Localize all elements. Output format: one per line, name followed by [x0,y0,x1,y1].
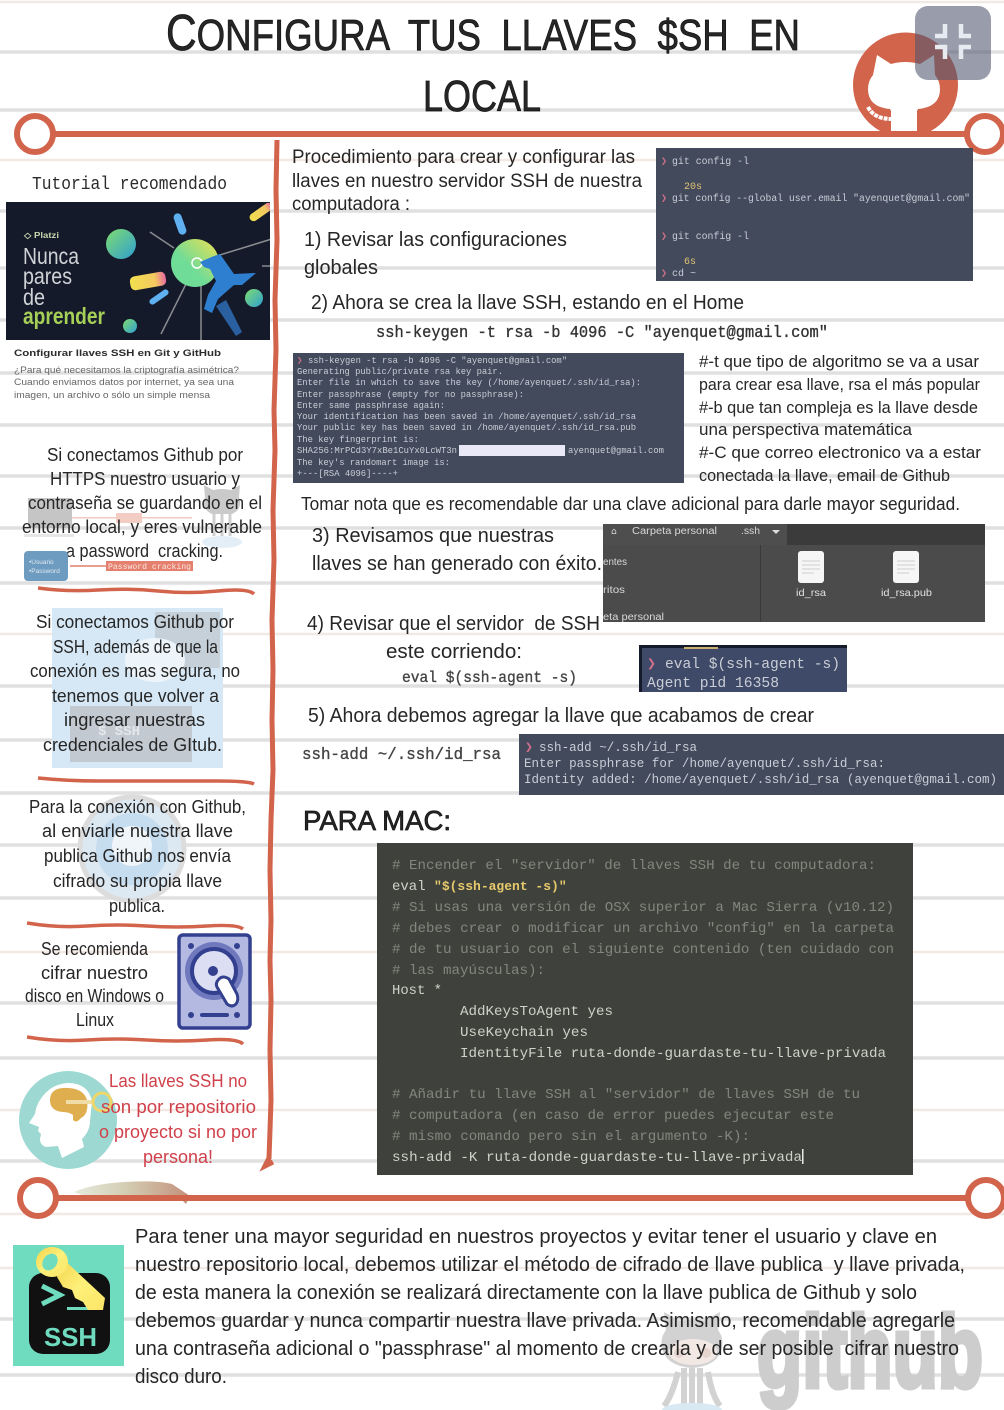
text: public key: cifrado su propia llave [53,871,222,891]
faded https diagram [24,485,242,548]
step 5: 5) Ahora debemos agregar la llave que acabamos de crear [308,705,814,727]
terminal: mac config: Host * [392,983,442,999]
text: ssh: ingresar nuestras [64,710,205,730]
screenshot: file manager: ritos [603,585,625,596]
conclusion text: nuestro repositorio local, debemos utilizar el método de cifrado de llave publica y llave privada, [135,1254,965,1276]
step 2 [311,292,828,343]
step 1: 1) Revisar las configuraciones [304,229,567,251]
terminal: mac config: # las mayúsculas): [392,963,545,979]
terminal: git config: git config -l [672,231,749,243]
heading: para mac: PARA MAC: [303,805,451,836]
screenshot: file manager: id_rsa.pub [881,587,932,599]
terminal: ssh-keygen: Enter file in which to save the key (/home/ayenquet/.ssh/id_rsa): [297,378,641,388]
screenshot: file manager: id_rsa [796,587,826,599]
step 2: ssh-keygen -t rsa -b 4096 -C "ayenquet@gmail.com" [376,324,828,343]
terminal: ssh-keygen: ayenquet@gmail.com [568,446,664,456]
image: platzi banner: de [23,284,45,310]
title [166,4,800,121]
bottom timeline bar [20,1180,1004,1216]
terminal: ssh-add: ssh-add ~/.ssh/id_rsa [539,740,697,755]
text: disk [25,939,164,1030]
text: callout: Las llaves SSH no [109,1071,247,1091]
conclusion text: una contraseña adicional o "passphrase" al momento de crearla y de ser posible cifrar nuestro [135,1338,959,1360]
terminal: git config: ❯ [661,194,667,205]
step 3: llaves se han generado con éxito. [312,553,602,575]
screenshot: file manager: ⌂ [611,527,617,537]
step 4 [307,613,600,687]
text: https [22,445,262,561]
text: https: contraseña se guardando en el [28,493,262,513]
notes: keygen flags: una perspectiva matemática [699,420,913,439]
badge: password cracking [70,561,193,572]
screenshot: file manager: .ssh [741,526,760,537]
terminal: ssh-keygen: Enter same passphrase again: [297,401,445,411]
terminal: ssh-keygen: Generating public/private rsa key pair. [297,367,503,377]
conclusion text: disco duro. [135,1366,227,1388]
terminal: ssh agent [639,645,847,692]
notes: keygen flags: #-C que correo electronico va a estar [699,443,981,462]
terminal: git config: cd ~ [672,268,696,280]
step 4: 4) Revisar que el servidor de SSH [307,613,600,635]
step 3: 3) Revisamos que nuestras [312,525,554,547]
terminal: ssh-keygen: Your identification has been saved in /home/ayenquet/.ssh/id_rsa [297,412,637,422]
text: callout: o proyecto si no por [99,1122,257,1142]
text: public key: publica. [109,896,165,916]
icon: github logo [853,32,958,138]
left column: callout per person [19,1071,257,1169]
conclusion text: de esta manera la conexión se realizará directamente con la llave publica de Github y solo [135,1282,917,1304]
terminal: mac config: AddKeysToAgent yes [460,1004,613,1020]
terminal: ssh-keygen: Enter passphrase (empty for no passphrase): [297,390,524,400]
screenshot: file manager [603,524,985,623]
left column: public key note [29,797,246,916]
terminal: mac config [377,843,913,1175]
title: LOCAL [423,72,541,121]
step 1 [304,229,567,279]
terminal: ssh-keygen: SHA256:MrPCd3Y7xBe1CuYx0LcWT3n [297,446,457,456]
step 4: eval $(ssh-agent -s) [402,669,577,687]
conclusion text [135,1226,965,1388]
icon: ssh key: SSH [44,1322,97,1352]
notes: keygen flags: conectada la llave, email de Github [699,466,950,485]
terminal: ssh-keygen: ssh-keygen -t rsa -b 4096 -C "ayenquet@gmail.com" [308,356,567,366]
terminal: ssh-add: Identity added: /home/ayenquet/.ssh/id_rsa (ayenquet@gmail.com) [524,772,997,787]
terminal: mac config: # computadora (en caso de error puedes ejecutar este [392,1108,834,1124]
right column: intro: computadora : [292,194,410,215]
text: https: Si conectamos Github por [47,445,243,465]
text: article summary: Configurar llaves SSH en Git y GitHub [14,348,221,359]
step 1: globales [304,257,378,279]
terminal: git config: ❯ [661,157,667,168]
notes: keygen flags [699,352,981,485]
text: article summary: imagen, un archivo o sólo un simple mensa [14,390,210,400]
step 3 [312,525,602,575]
image: platzi banner [6,201,275,340]
terminal: ssh-keygen: The key's randomart image is: [297,458,450,468]
text: ssh [30,612,240,755]
text: article summary: ¿Para qué necesitamos la criptografía asimétrica? [14,365,239,375]
vertical divider [265,140,277,1166]
terminal: mac config: # de tu usuario con el siguiente contenido (ten cuidado con [392,942,894,958]
step 5: ssh-add ~/.ssh/id_rsa [302,746,501,765]
text: article summary: Cuando enviamos datos por internet, ya sea una [14,377,234,387]
terminal: ssh-add: Enter passphrase for /home/ayenquet/.ssh/id_rsa: [524,756,885,771]
heading: tutorial: Tutorial recomendado [32,175,227,195]
note: passphrase: Tomar nota que es recomendable dar una clave adicional para darle mayor seguridad. [301,494,960,514]
image: platzi banner: Nunca [23,243,79,269]
left column: https note [22,445,262,581]
text: ssh: credenciales de GItub. [43,735,222,755]
icon: head with key [19,1071,117,1169]
text: callout: persona! [143,1147,213,1167]
top timeline bar [17,116,1003,152]
image: platzi banner: pares [23,263,72,289]
terminal: mac config: eval "$(ssh-agent -s)" [392,879,567,895]
text: public key: publica Github nos envía [44,846,232,866]
text: ssh: Si conectamos Github por [36,612,234,632]
terminal: ssh-add: ❯ [525,740,533,755]
text: ssh: SSH, además de que la [53,637,219,657]
faded ssh diagram: $ SSH [98,724,140,740]
terminal: ssh-keygen: ❯ [297,356,302,366]
badge: usuario password: •Password [29,568,60,575]
image: platzi banner: ◇ Platzi [23,231,59,240]
terminal: git config: 20s [684,182,702,193]
terminal: git config: git config --global user.email "ayenquet@gmail.com" [672,193,970,205]
text: public key: al enviarle nuestra llave [42,821,233,841]
text: ssh: tenemos que volver a [52,686,220,706]
text: public key: Para la conexión con Github, [29,797,246,817]
text: https: HTTPS nuestro usuario y [50,469,240,489]
text: disk: Linux [76,1010,114,1030]
terminal: ssh-keygen: +---[RSA 4096]----+ [297,469,398,479]
text: https: a password cracking. [66,541,223,561]
icon: ssh key [13,1245,124,1366]
terminal: git config: ❯ [661,269,667,280]
text: article summary [14,348,239,400]
watermark: octocat [662,1312,722,1410]
left column: disk note [25,935,250,1030]
watermark: github logotype [662,1310,982,1410]
terminal: ssh-add [519,734,1004,795]
faded ssh diagram [52,608,223,768]
terminal: ssh-keygen: Your public key has been saved in /home/ayenquet/.ssh/id_rsa.pub [297,423,636,433]
text: disk: disco en Windows o [25,986,164,1006]
badge: password cracking: Password cracking [108,563,191,572]
terminal: ssh-keygen: The key fingerprint is: [297,435,419,445]
left column: recommended tutorial [6,175,275,400]
screenshot: file manager: Carpeta personal [632,526,717,537]
terminal: mac config: # Añadir tu llave SSH al "servidor" de llaves SSH de tu [392,1087,860,1103]
title: CONFIGURA TUS LLAVES $SH EN [166,4,800,61]
terminal: git config [656,148,973,281]
right column: intro: Procedimiento para crear y configurar las [292,147,635,168]
terminal: mac config: UseKeychain yes [460,1025,588,1041]
badge: usuario password [24,551,68,581]
conclusion text: debemos guardar y nunca compartir nuestra llave privada. Asimismo, recomendable agregarle [135,1310,955,1332]
notes: keygen flags: para crear esa llave, rsa el más popular [699,375,980,394]
terminal: mac config: # mismo comando pero sin el argumento -K): [392,1129,750,1145]
text: callout [99,1071,257,1167]
terminal: ssh-keygen [293,353,684,483]
faded github watermark [80,797,184,901]
terminal: mac config: ssh-add -K ruta-donde-guardaste-tu-llave-privada [392,1150,802,1166]
conclusion text: Para tener una mayor seguridad en nuestros proyectos y evitar tener el usuario y clave en [135,1226,937,1248]
left column: ssh note [30,608,240,768]
terminal: mac config: # Si usas una versión de OSX superior a Mac Sierra (v10.12) [392,900,894,916]
text: public key [29,797,246,916]
notes: keygen flags: #-b que tan compleja es la llave desde [699,398,978,417]
text: callout: son por repositorio [101,1097,256,1117]
text: disk: Se recomienda [41,939,149,959]
right column: intro: llaves en nuestro servidor SSH de nuestra [292,171,642,192]
icon: hard disk [179,935,250,1028]
step 5 [302,705,814,765]
step 4: este corriendo: [386,641,522,663]
screenshot: file manager: entes [603,557,627,568]
terminal: ssh agent: Agent pid 16358 [647,675,779,692]
terminal: mac config: IdentityFile ruta-donde-guardaste-tu-llave-privada [460,1046,886,1062]
terminal: git config: git config -l [672,156,749,168]
terminal: ssh agent: ❯ [647,656,656,673]
icon: fullscreen overlay button [915,6,991,80]
terminal: git config: 6s [684,257,696,268]
notes: keygen flags: #-t que tipo de algoritmo se va a usar [699,352,979,371]
text: https: entorno local, y eres vulnerable [22,517,262,537]
right column: intro [292,147,642,215]
badge: usuario password: •Usuario [29,559,54,566]
terminal: ssh agent: eval $(ssh-agent -s) [665,656,840,673]
text: disk: cifrar nuestro [41,963,148,983]
terminal: git config: ❯ [661,232,667,243]
text: ssh: conexión es mas segura, no [30,661,240,681]
image: platzi banner: aprender [23,303,105,329]
terminal: mac config: # Encender el "servidor" de llaves SSH de tu computadora: [392,858,876,874]
terminal: mac config: # debes crear o modificar un archivo "config" en la carpeta [392,921,894,937]
screenshot: file manager: eta personal [603,612,664,623]
step 2: 2) Ahora se crea la llave SSH, estando en el Home [311,292,744,314]
